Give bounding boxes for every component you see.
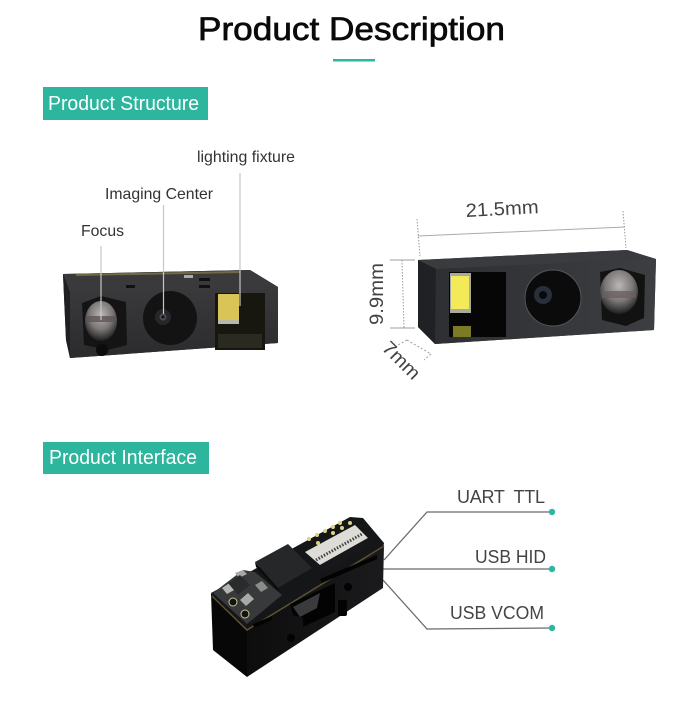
side face	[211, 593, 247, 677]
title underline	[333, 59, 375, 62]
front slit and openings	[253, 555, 377, 642]
pointer lines	[101, 173, 240, 320]
dimension lines	[390, 211, 626, 360]
focus lens	[600, 268, 645, 326]
label: lighting fixture: lighting fixture	[197, 149, 295, 166]
imaging lens	[143, 291, 197, 345]
lighting window	[215, 293, 265, 350]
inner lens	[293, 593, 320, 617]
gold pads	[307, 521, 352, 545]
white connector	[305, 525, 372, 571]
dimension: depth: 7mm	[377, 338, 424, 384]
label: USB HID: USB HID	[475, 547, 546, 567]
module dimensioned view	[390, 211, 656, 360]
front face	[247, 545, 384, 677]
section badge: product interface	[43, 442, 209, 474]
connector dots	[549, 509, 555, 631]
mounting holes	[229, 598, 249, 618]
module body	[63, 270, 278, 358]
circuit board	[211, 517, 384, 630]
chip	[255, 544, 312, 592]
section badge: product interface: Product Interface	[49, 447, 197, 469]
module front view	[63, 173, 278, 358]
LED window	[449, 272, 506, 337]
module interface view	[211, 517, 384, 677]
section badge: product structure: Product Structure	[48, 93, 199, 115]
module body	[418, 250, 656, 344]
focus lens	[82, 296, 127, 356]
title: Product Description	[198, 11, 505, 47]
label: UART TTL: UART TTL	[457, 487, 545, 507]
dimension: width: 21.5mm	[465, 197, 539, 222]
connector lines	[383, 512, 552, 629]
section badge: product structure	[43, 87, 208, 120]
label: imaging center: Imaging Center	[105, 186, 214, 203]
label: USB VCOM: USB VCOM	[450, 603, 544, 623]
camera lens	[525, 270, 581, 326]
label: focus: Focus	[81, 223, 124, 240]
board left section	[213, 570, 282, 624]
board edge	[212, 546, 384, 630]
dimension: height: 9.9mm	[367, 263, 388, 325]
